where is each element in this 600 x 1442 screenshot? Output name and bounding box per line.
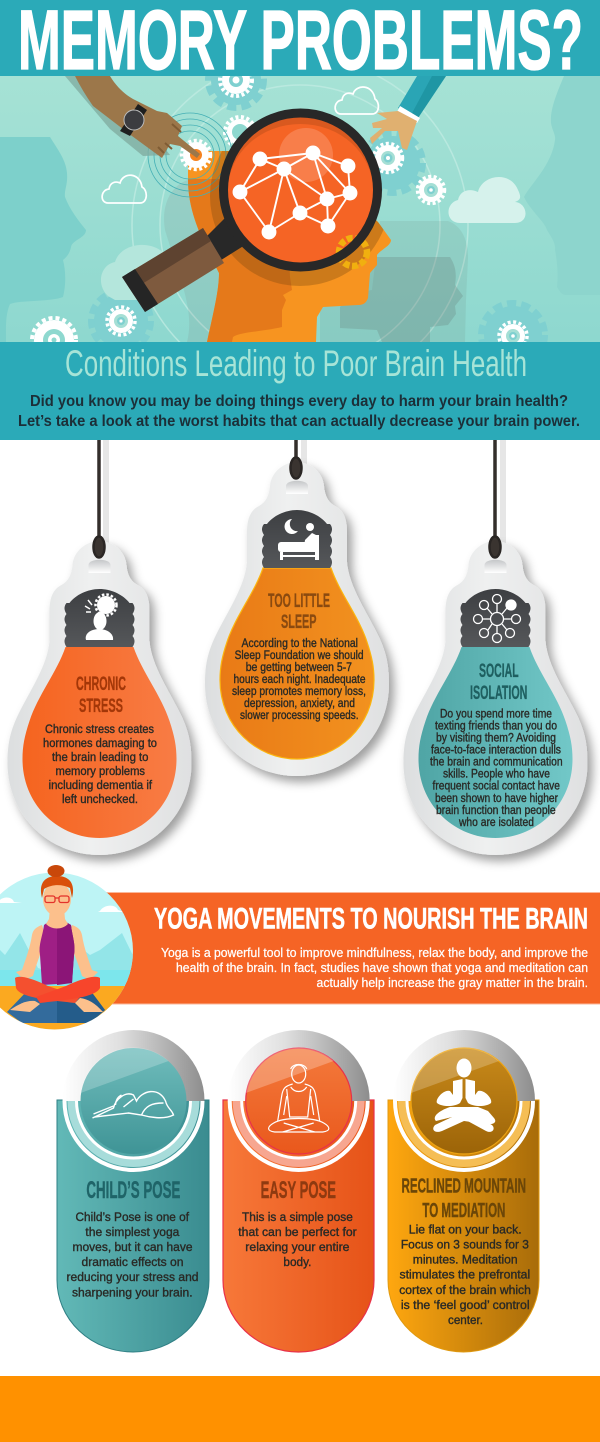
gear: white touched xyxy=(182,140,210,170)
crossed legs xyxy=(15,977,80,1003)
icon: social network xyxy=(474,594,520,642)
title: SLEEP xyxy=(281,612,317,633)
text: been shown to have higher xyxy=(435,791,558,805)
yoga text: Yoga is a powerful tool to improve mindfulness, relax the body, and improve the xyxy=(161,946,588,960)
text: dramatic effects on xyxy=(82,1255,184,1269)
text: moves, but it can have xyxy=(72,1240,193,1254)
rings around finger xyxy=(148,113,232,197)
card: child's pose xyxy=(57,1030,209,1352)
text: skills. People who have xyxy=(443,766,550,780)
text: frequent social contact have xyxy=(432,778,560,792)
intro text: Let’s take a look at the worst habits that can actually decrease your brain power. xyxy=(18,413,580,430)
text xyxy=(66,1210,199,1300)
icon: sleeping in bed xyxy=(278,519,319,560)
text: Lie flat on your back. xyxy=(409,1222,522,1236)
text: reducing your stress and xyxy=(66,1270,199,1284)
gear: behind lens xyxy=(225,117,255,147)
left arm with watch xyxy=(65,76,200,158)
title: TOO LITTLE xyxy=(268,591,330,612)
brain network xyxy=(234,146,356,238)
text: sharpening your brain. xyxy=(72,1286,193,1300)
gear: teal top xyxy=(205,76,267,111)
text: This is a simple pose xyxy=(242,1210,353,1224)
gear: teal lower left xyxy=(92,292,150,350)
handle xyxy=(122,218,245,312)
figure xyxy=(10,865,103,1012)
yoga text: health of the brain. In fact, studies have shown that yoga and meditation can xyxy=(176,961,588,975)
bulb: chronic stress xyxy=(8,440,192,855)
text: memory problems xyxy=(56,764,145,778)
title xyxy=(76,674,126,717)
socket xyxy=(64,589,134,647)
cloud: filled right xyxy=(448,177,526,223)
text: face-to-face interaction dulls xyxy=(431,742,561,756)
text: slower processing speeds. xyxy=(240,708,359,722)
gray head front xyxy=(340,257,463,342)
cloud: outline left xyxy=(102,175,146,203)
text: depression, anxiety, and xyxy=(244,696,355,710)
text: that can be perfect for xyxy=(238,1225,357,1239)
title: EASY POSE xyxy=(261,1177,336,1204)
icon: meditating figure xyxy=(433,1058,495,1132)
text: sleep promotes memory loss, xyxy=(232,684,366,698)
intro text xyxy=(18,393,580,430)
yoga text: actually help increase the gray matter in the brain. xyxy=(316,976,588,990)
text xyxy=(430,706,563,829)
text: Do you spend more time xyxy=(440,706,552,720)
icon: easy pose outline xyxy=(269,1064,329,1132)
title: SOCIAL xyxy=(479,661,519,682)
title: STRESS xyxy=(79,696,123,717)
text: hours each night. Inadequate xyxy=(234,672,366,686)
gear: teal right xyxy=(364,134,422,192)
yoga banner xyxy=(100,892,600,1004)
silhouette: right head xyxy=(524,76,600,264)
text: is the ‘feel good’ control xyxy=(401,1298,530,1312)
text: texting friends than you do xyxy=(435,718,557,732)
card: easy pose xyxy=(223,1030,374,1352)
icon: child's pose xyxy=(92,1092,174,1118)
socket xyxy=(262,510,332,568)
text: body. xyxy=(283,1255,311,1269)
text xyxy=(399,1222,531,1327)
gear: white bottom right xyxy=(497,320,529,342)
watch xyxy=(120,104,147,136)
text: cortex of the brain which xyxy=(399,1283,531,1297)
gray head left xyxy=(164,180,219,342)
title xyxy=(268,591,330,633)
text: Sleep Foundation we should xyxy=(235,648,364,662)
title: TO MEDIATION xyxy=(422,1200,505,1222)
string xyxy=(493,440,497,545)
bulb: too little sleep xyxy=(205,440,389,776)
cloud: outline top xyxy=(335,87,378,114)
title xyxy=(402,1176,526,1222)
gear: yellow xyxy=(339,238,367,266)
intro text: Did you know you may be doing things every day to harm your brain health? xyxy=(30,393,568,410)
lens rim xyxy=(224,113,378,267)
gear: white lower left xyxy=(30,316,78,342)
text: According to the National xyxy=(242,636,358,650)
text: Child’s Pose is one of xyxy=(76,1210,190,1224)
badge xyxy=(62,1030,204,1170)
magnifier xyxy=(122,106,390,312)
text: be getting between 5-7 xyxy=(246,660,352,674)
text: including dementia if xyxy=(49,778,153,792)
text: the brain leading to xyxy=(52,750,149,764)
gray head back xyxy=(320,221,468,342)
socket xyxy=(460,589,530,647)
orange head xyxy=(188,151,391,342)
text: center. xyxy=(448,1313,483,1327)
title: CHILD’S POSE xyxy=(86,1177,180,1204)
title: CHRONIC xyxy=(76,674,126,695)
text: Chronic stress creates xyxy=(45,722,154,736)
text: left unchecked. xyxy=(62,792,138,806)
silhouette: left head xyxy=(0,137,86,342)
title: ISOLATION xyxy=(470,683,527,704)
card: reclined mountain xyxy=(388,1030,539,1352)
intro band xyxy=(0,342,600,440)
badge xyxy=(393,1030,535,1170)
icon: stressed head xyxy=(85,594,116,640)
cloud: pale lower left xyxy=(101,245,165,300)
yoga text xyxy=(161,946,588,990)
concentric circles xyxy=(131,76,469,342)
gear: white right hand xyxy=(374,144,402,172)
bulb: social isolation xyxy=(404,440,588,855)
footer band xyxy=(0,1376,600,1442)
text: the simplest yoga xyxy=(85,1225,180,1239)
text: who are isolated xyxy=(458,815,534,829)
text xyxy=(232,636,366,722)
text: the brain and communication xyxy=(430,754,563,768)
badge xyxy=(228,1030,370,1170)
title band xyxy=(0,0,600,87)
gear: teal lower right xyxy=(478,300,548,342)
text: hormones damaging to xyxy=(43,736,157,750)
scene xyxy=(0,872,133,1030)
text: Focus on 3 sounds for 3 xyxy=(401,1238,529,1252)
lens shadow on head xyxy=(210,151,384,286)
text: relaxing your entire xyxy=(245,1240,350,1254)
string xyxy=(294,440,298,466)
string xyxy=(97,440,101,545)
gear: white right xyxy=(418,176,444,204)
gear: white lower centre xyxy=(107,307,135,335)
title xyxy=(470,661,527,704)
illustration: brain under magnifier xyxy=(0,76,600,342)
text: by visiting them? Avoiding xyxy=(436,730,556,744)
text: minutes. Meditation xyxy=(413,1252,518,1266)
text xyxy=(238,1210,357,1269)
text xyxy=(43,722,157,806)
text: brain function than people xyxy=(436,803,556,817)
text: stimulates the prefrontal xyxy=(400,1268,530,1282)
right arm with hand xyxy=(370,76,446,150)
woman meditating xyxy=(0,865,140,1036)
